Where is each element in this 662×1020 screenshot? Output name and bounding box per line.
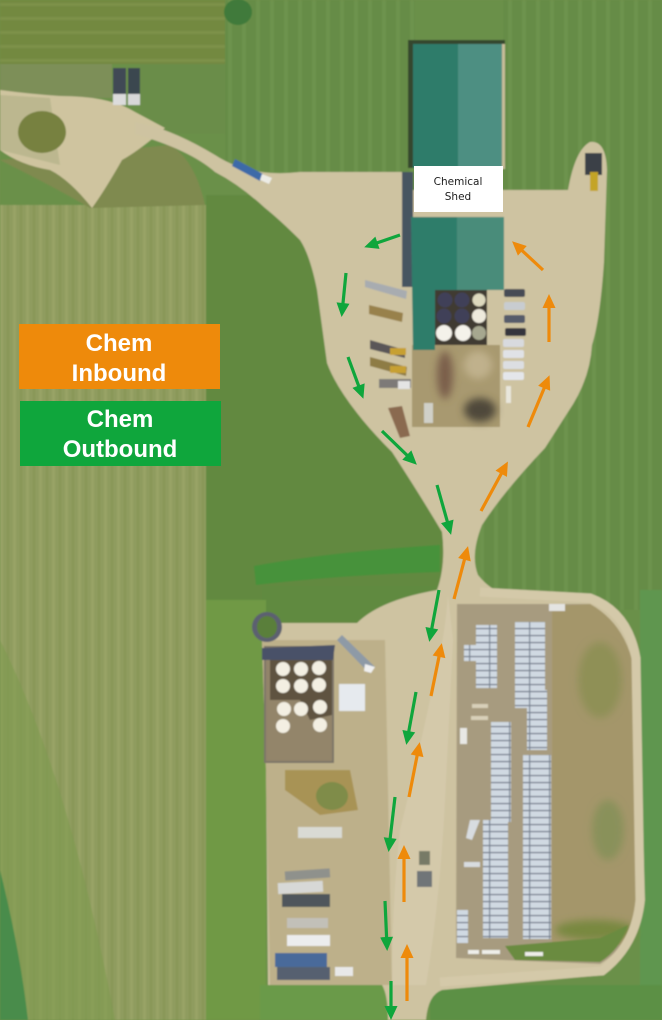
tan field in the loop xyxy=(552,604,636,948)
tank pad south xyxy=(252,612,282,642)
label: Chemical Shed: Chemical xyxy=(434,176,482,188)
label: Chemical Shed: Shed xyxy=(445,191,471,203)
tanker xyxy=(337,635,375,673)
left hay field xyxy=(0,205,206,1020)
shed roof north xyxy=(413,44,458,168)
farm area at top left xyxy=(0,145,205,208)
pipe yard floor xyxy=(456,604,636,964)
tree at the top xyxy=(224,0,252,25)
service yard behind the shed xyxy=(412,345,500,427)
legend: chem outbound: Chem xyxy=(87,406,153,433)
main yard xyxy=(135,122,645,1020)
legend: chem inbound: Inbound xyxy=(72,360,166,387)
dirt around west side of lower road xyxy=(262,640,392,985)
bright grass strip xyxy=(254,545,440,585)
storage tanks by the shed xyxy=(435,290,487,345)
pipe stacks xyxy=(476,625,497,688)
label: Chemical Shed xyxy=(414,166,503,212)
parked tanker trucks xyxy=(298,827,342,838)
outbound route arrows xyxy=(342,235,450,1016)
lower road core xyxy=(392,595,453,985)
vegetation south of pad xyxy=(285,770,358,815)
parked cars xyxy=(504,289,525,297)
pile of vegetation xyxy=(18,111,66,153)
lower meadow xyxy=(206,600,266,1020)
top fields xyxy=(0,0,225,64)
loader at upper right xyxy=(585,153,602,175)
dump trucks at farm xyxy=(113,68,126,96)
center meadow xyxy=(206,195,446,625)
legend: chem outbound xyxy=(20,401,221,466)
loose pipes xyxy=(472,704,488,708)
small buildings in the road xyxy=(419,851,430,865)
shed roof south xyxy=(411,217,457,350)
equipment west of the shed xyxy=(365,280,407,299)
inbound route arrows xyxy=(404,244,549,1001)
right meadow xyxy=(480,190,662,610)
loop road xyxy=(440,592,640,982)
legend: chem inbound: Chem xyxy=(86,330,152,357)
legend: chem outbound: Outbound xyxy=(63,436,177,463)
blue truck on the entry road xyxy=(232,159,263,181)
small white building xyxy=(339,684,365,711)
shed shadow xyxy=(408,40,505,168)
legend: chem inbound xyxy=(19,324,220,389)
